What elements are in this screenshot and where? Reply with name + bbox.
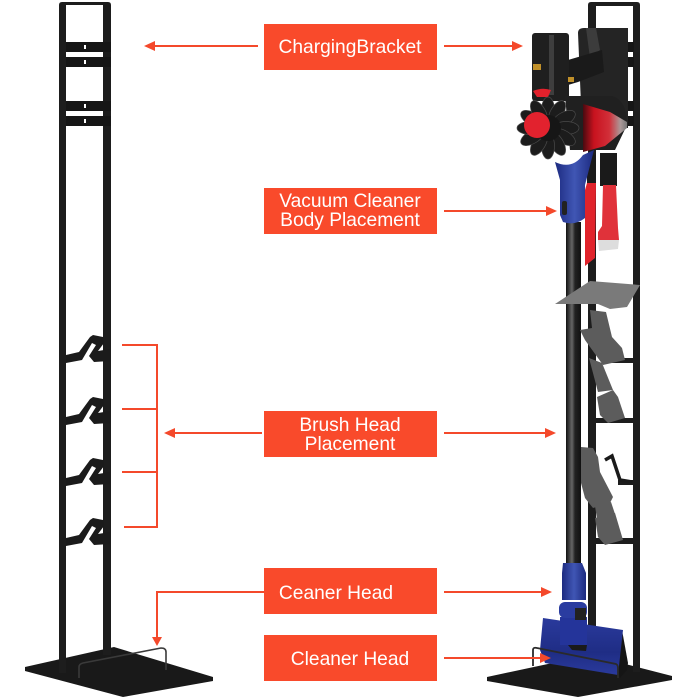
wire handle (533, 648, 618, 678)
dock clip (586, 28, 600, 58)
label: cleaner head (264, 635, 437, 681)
cleaner head (533, 563, 628, 678)
charging bracket crossbars (66, 42, 111, 126)
right stand base (487, 655, 672, 697)
brush head shadow side (616, 630, 628, 678)
brush tool red (598, 185, 619, 240)
tool hook (605, 456, 632, 482)
left stand (25, 2, 213, 697)
arrow: brush head right (444, 428, 556, 438)
arm button (568, 77, 574, 82)
label: vacuum cleaner body placement: Body Placement (280, 210, 421, 231)
right stand (487, 2, 672, 697)
brush tool tube (600, 153, 617, 186)
wand (566, 222, 581, 567)
bracket: brush head (122, 345, 157, 527)
yellow button (533, 64, 541, 70)
arrow: cleaner head right (444, 653, 551, 663)
tray (555, 281, 640, 309)
brush bristles (598, 240, 619, 251)
right stand crossbars (628, 42, 634, 126)
label: charging bracket: ChargingBracket (279, 37, 422, 58)
red cap (524, 112, 550, 138)
label: brush head placement (264, 411, 437, 457)
label: charging bracket (264, 24, 437, 70)
charging dock (578, 28, 628, 128)
neck joint (559, 602, 587, 618)
arrow: elbow to left base (152, 592, 264, 646)
label: ceaner head (264, 568, 437, 614)
tool end (597, 390, 625, 423)
dock arm (568, 50, 604, 85)
lower tool end (595, 513, 623, 545)
left stand posts and top frame (59, 2, 111, 673)
upper tool (580, 310, 625, 365)
arrow: charging bracket right (444, 41, 523, 51)
arrow: ceaner head right (444, 587, 552, 597)
red latch (533, 89, 551, 97)
handle button (562, 201, 567, 215)
right stand frame (588, 2, 640, 672)
motor body (565, 96, 627, 150)
arrow: brush head left (164, 428, 262, 438)
grey tools (580, 310, 632, 545)
lower tool tube (595, 502, 615, 519)
red band (583, 104, 627, 152)
blue floor head (540, 618, 623, 675)
tool connector (589, 358, 613, 392)
crossbar holes (84, 45, 86, 123)
label: cleaner head: Cleaner Head (291, 649, 409, 670)
right stand rungs (590, 358, 634, 544)
canister highlight (549, 35, 554, 95)
label: vacuum cleaner body placement: Vacuum Cleaner (279, 191, 421, 212)
canister (532, 33, 569, 101)
label: ceaner head: Ceaner Head (279, 583, 393, 604)
arrow: body placement (444, 206, 557, 216)
crevice tool red (585, 183, 596, 266)
cyclone (517, 97, 579, 159)
tube black (587, 155, 596, 185)
neck base (568, 645, 587, 651)
label: brush head placement: Brush Head (299, 415, 401, 436)
brush head hooks (66, 335, 110, 546)
lower tool (581, 447, 613, 508)
wire handle (79, 648, 166, 678)
blue handle (555, 150, 594, 223)
label: brush head placement: Placement (305, 434, 396, 455)
left stand base (25, 647, 213, 697)
arrow: charging bracket left (144, 41, 258, 51)
label: vacuum cleaner body placement (264, 188, 437, 234)
lower neck (560, 617, 587, 645)
arrows (122, 41, 557, 663)
upper neck (562, 563, 586, 600)
neck spring (575, 608, 586, 620)
vacuum cleaner (517, 28, 628, 567)
